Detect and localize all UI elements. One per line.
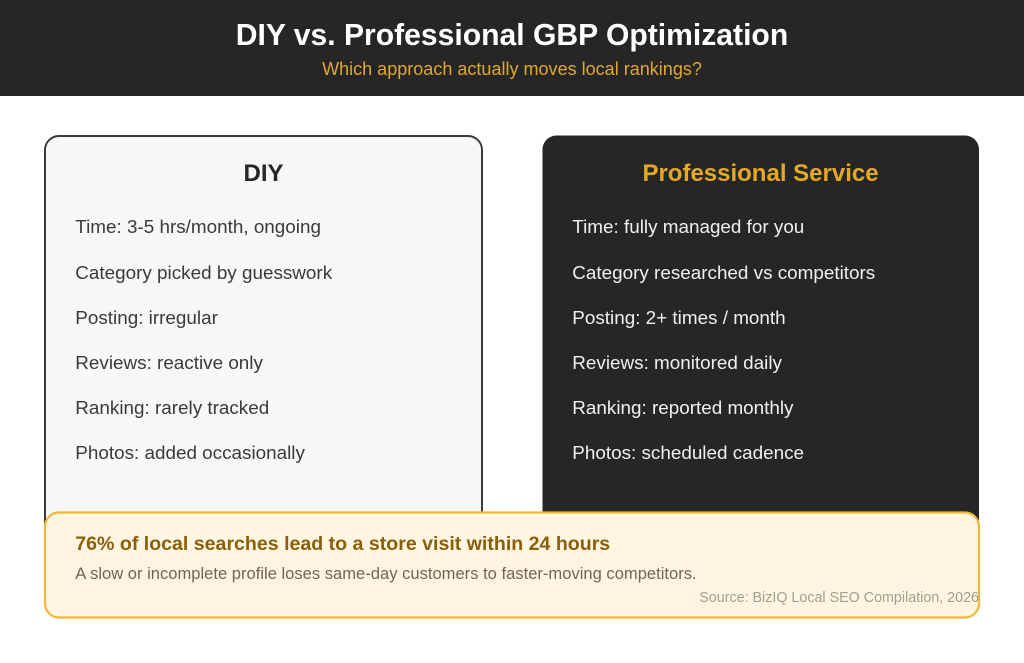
list: DIY points: Category picked by guesswork [75,262,333,283]
panel: DIY [45,136,482,556]
subtitle: Which approach actually moves local rankings? [322,59,702,79]
list: professional points: Ranking: reported monthly [572,397,794,418]
list: DIY points: Ranking: rarely tracked [75,397,269,418]
list: professional points: Time: fully managed for you [572,216,804,237]
list: DIY points [75,216,333,463]
callout text: A slow or incomplete profile loses same-day customers to faster-moving competitors. [75,564,697,583]
list: DIY points: Time: 3-5 hrs/month, ongoing [75,216,321,237]
list: professional points: Photos: scheduled cadence [572,442,804,463]
panel: Professional Service [542,136,979,556]
list: professional points: Reviews: monitored daily [572,352,783,373]
list: professional points: Posting: 2+ times / month [572,307,786,328]
list: DIY points: Reviews: reactive only [75,352,263,373]
callout: statistic [45,512,979,618]
list: professional points: Category researched vs competitors [572,262,875,283]
source note: Source: BizIQ Local SEO Compilation, 2026 [699,590,979,606]
list: DIY points: Photos: added occasionally [75,442,305,463]
heading: Professional Service: Professional Service [642,160,879,187]
callout heading: 76% of local searches lead to a store visit within 24 hours [75,533,610,555]
list: DIY points: Posting: irregular [75,307,218,328]
heading: DIY: DIY [243,160,284,187]
list: professional points [572,216,875,463]
title: DIY vs. Professional GBP Optimization [236,19,788,52]
header banner [0,0,1024,96]
